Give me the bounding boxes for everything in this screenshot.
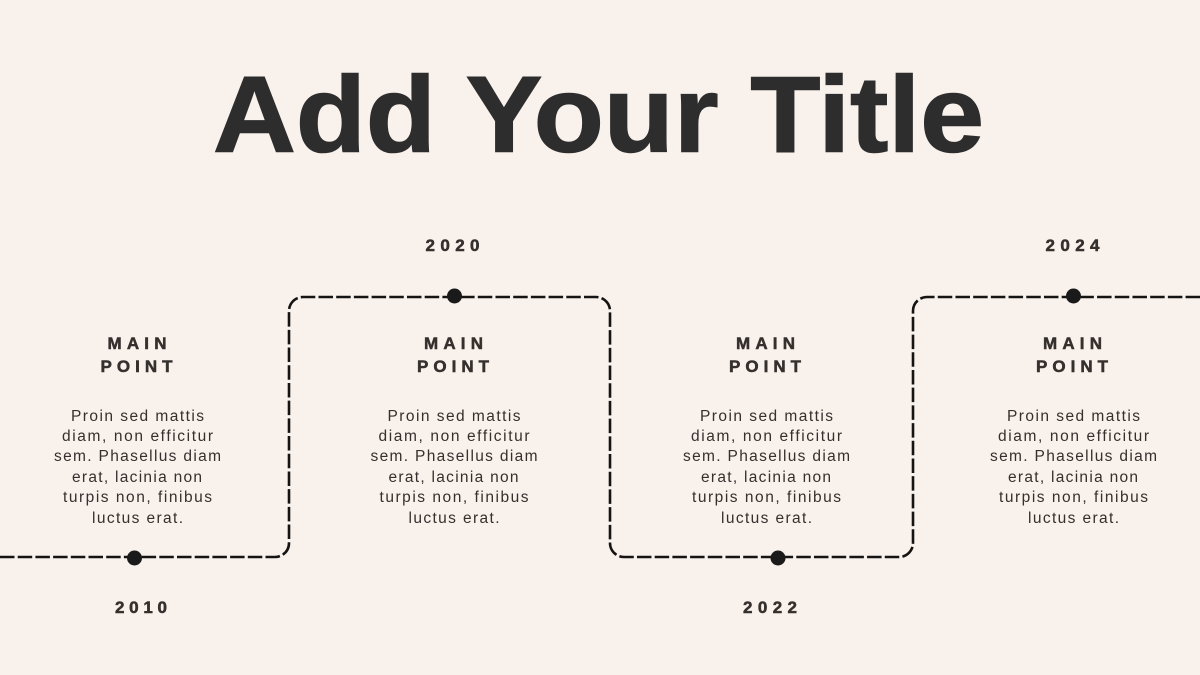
heading: POINT — [100, 357, 173, 376]
year label 2024: 2024 — [1046, 236, 1100, 255]
body text: sem. Phasellus diam — [54, 448, 221, 465]
body text — [370, 408, 538, 527]
heading: POINT — [1036, 357, 1109, 376]
heading — [1036, 334, 1109, 376]
body text: sem. Phasellus diam — [370, 448, 538, 465]
body text: luctus erat. — [408, 510, 500, 527]
body text: erat, lacinia non — [72, 469, 202, 486]
body text: luctus erat. — [92, 510, 183, 527]
panel: milestone 2010 — [54, 334, 221, 527]
heading: MAIN — [736, 334, 795, 353]
body text: turpis non, finibus — [380, 489, 529, 506]
body text: Proin sed mattis — [71, 408, 204, 425]
heading — [417, 334, 490, 376]
year label 2020: 2020 — [426, 236, 480, 255]
body text: erat, lacinia non — [388, 469, 518, 486]
timeline marker 2024 — [1066, 288, 1081, 304]
body text: luctus erat. — [1028, 510, 1119, 527]
panel: milestone 2024 — [990, 334, 1157, 527]
body text: erat, lacinia non — [701, 469, 831, 486]
body text: Proin sed mattis — [388, 408, 521, 425]
year label 2022: 2022 — [743, 598, 797, 617]
heading: POINT — [417, 357, 490, 376]
dashed timeline path — [0, 297, 1200, 557]
heading — [100, 334, 173, 376]
body text: Proin sed mattis — [700, 408, 833, 425]
panel: milestone 2022 — [683, 334, 850, 527]
timeline marker 2010 — [127, 550, 142, 566]
body text — [683, 408, 850, 527]
body text: turpis non, finibus — [63, 489, 212, 506]
body text: turpis non, finibus — [692, 489, 841, 506]
year label 2010: 2010 — [115, 598, 167, 617]
body text: diam, non efficitur — [691, 428, 842, 445]
body text: turpis non, finibus — [999, 489, 1148, 506]
body text: diam, non efficitur — [62, 428, 213, 445]
heading: MAIN — [108, 334, 166, 353]
timeline marker 2022 — [770, 550, 786, 566]
title: Add Your Title — [213, 54, 984, 174]
panel: milestone 2020 — [370, 334, 538, 527]
heading — [729, 334, 802, 376]
body text: diam, non efficitur — [378, 428, 530, 445]
body text: diam, non efficitur — [998, 428, 1149, 445]
body text: luctus erat. — [721, 510, 812, 527]
body text: erat, lacinia non — [1008, 469, 1138, 486]
body text — [54, 408, 221, 527]
body text: sem. Phasellus diam — [990, 448, 1157, 465]
body text: Proin sed mattis — [1007, 408, 1140, 425]
heading: MAIN — [1043, 334, 1102, 353]
heading: MAIN — [424, 334, 483, 353]
heading: POINT — [729, 357, 802, 376]
body text: sem. Phasellus diam — [683, 448, 850, 465]
body text — [990, 408, 1157, 527]
timeline marker 2020 — [447, 288, 462, 304]
